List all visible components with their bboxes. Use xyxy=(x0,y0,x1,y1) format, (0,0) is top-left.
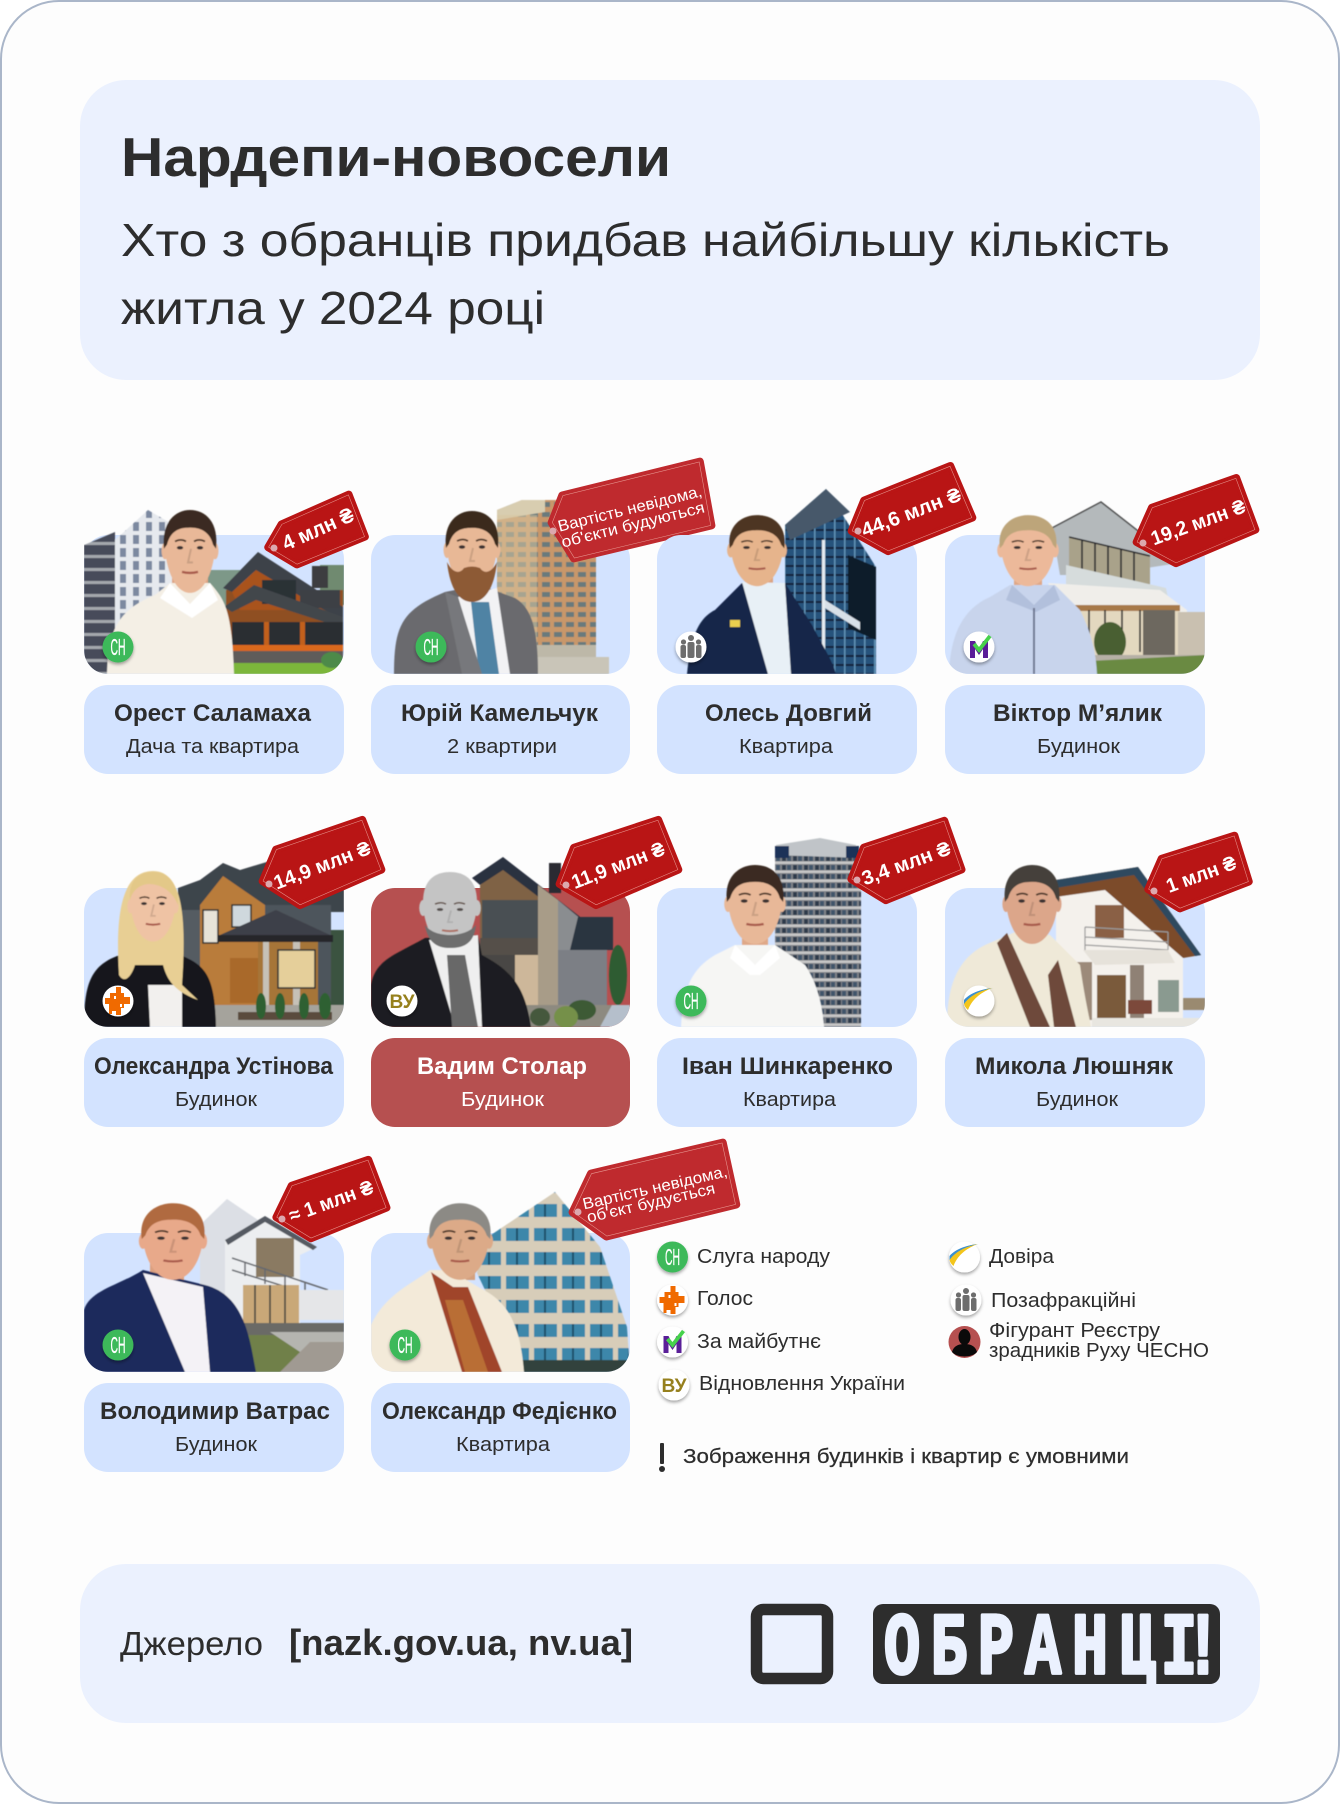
name box: Будинок xyxy=(1036,1089,1118,1111)
name box: Дача та квартира xyxy=(126,736,300,758)
legend item: Голос: Голос xyxy=(697,1288,753,1310)
card: Олександра Устінова xyxy=(84,820,382,1127)
price tag: 14,9 млн ₴ xyxy=(271,837,374,894)
legend item: Довіра xyxy=(949,1242,1055,1272)
name box xyxy=(945,685,1205,774)
badge: Слуга народу: СН xyxy=(110,634,126,660)
legend item: Довіра: Довіра xyxy=(989,1246,1055,1268)
photo panel xyxy=(371,1233,630,1372)
price tag xyxy=(268,494,365,565)
source text: [nazk.gov.ua, nv.ua] xyxy=(289,1622,633,1663)
note: images are conditional xyxy=(659,1443,1129,1472)
name box: Віктор М’ялик xyxy=(993,700,1163,727)
legend item: Слуга народу: Слуга народу xyxy=(697,1246,830,1268)
illustration: tower and portrait xyxy=(394,500,609,674)
card: Юрій Камельчук xyxy=(371,462,712,774)
name box: Володимир Ватрас xyxy=(100,1398,330,1425)
price tag: 1 млн ₴ xyxy=(1163,852,1239,898)
badge: Відновлення України xyxy=(386,986,418,1016)
card: Микола Люшняк xyxy=(945,836,1249,1127)
name box: Квартира xyxy=(456,1434,551,1456)
name box: Олександра Устінова xyxy=(94,1053,334,1080)
legend item: Позафракційні xyxy=(950,1284,1136,1316)
badge: Слуга народу xyxy=(102,1330,134,1360)
price tag: 4 млн ₴ xyxy=(279,503,358,555)
name box xyxy=(945,1038,1205,1127)
price tag: unknown value xyxy=(572,1142,736,1237)
name box xyxy=(371,685,630,774)
badge: Слуга народу: СН xyxy=(424,634,438,660)
price tag: 3,4 млн ₴ xyxy=(859,838,954,890)
price tag xyxy=(276,1160,387,1238)
header panel xyxy=(80,80,1260,380)
name box: Квартира xyxy=(743,1089,837,1111)
legend item: Фігурант Реєстру зрадників xyxy=(948,1320,1209,1362)
legend item: Слуга народу xyxy=(657,1242,830,1272)
card: Олександр Федієнко xyxy=(371,1142,736,1472)
price tag: unknown value: Вартість невідома, xyxy=(556,483,704,536)
card: Вадим Столар (highlighted) xyxy=(371,820,678,1127)
name box: Орест Саламаха xyxy=(114,700,312,727)
price tag xyxy=(851,821,962,900)
illustration: modern house and portrait xyxy=(949,502,1205,674)
badge: Слуга народу xyxy=(676,986,706,1016)
illustration: house and portrait xyxy=(947,865,1205,1027)
legend item: За майбутнє xyxy=(657,1326,821,1358)
price tag: unknown value xyxy=(550,462,712,558)
photo panel xyxy=(84,888,344,1027)
footer panel xyxy=(80,1564,1260,1723)
name box xyxy=(371,1038,630,1127)
illustration: tower and portrait xyxy=(681,838,861,1027)
price tag: 11,9 млн ₴ xyxy=(569,838,668,894)
badge: Слуга народу: СН xyxy=(398,1332,412,1358)
price tag: 19,2 млн ₴ xyxy=(1148,496,1249,550)
badge: Позафракційні xyxy=(676,632,706,662)
logo: wordmark: ОБРАНЦІ! xyxy=(884,1601,1221,1700)
subtitle: житла у 2024 році xyxy=(121,282,545,334)
legend item: Відновлення України: ВУ xyxy=(662,1376,687,1397)
badge: Слуга народу xyxy=(102,632,134,662)
legend: parties xyxy=(657,1242,1209,1400)
legend item: Фігурант Реєстру зрадників: зрадників Руху ЧЕСНО xyxy=(989,1340,1209,1362)
card: Володимир Ватрас xyxy=(84,1160,387,1472)
name box: Юрій Камельчук xyxy=(401,700,599,727)
photo panel xyxy=(657,888,917,1027)
card: Віктор М'ялик xyxy=(945,478,1256,774)
subtitle xyxy=(121,214,1170,334)
name box: Квартира xyxy=(739,736,834,758)
illustration: apartment block and portrait xyxy=(371,1192,630,1372)
legend item: Слуга народу: СН xyxy=(665,1244,680,1270)
photo panel xyxy=(84,535,344,674)
price tag xyxy=(1136,478,1256,563)
name box xyxy=(657,1038,917,1127)
note: images are conditional: Зображення будинків і квартир є умовними xyxy=(683,1446,1129,1468)
legend item: Голос xyxy=(657,1284,753,1316)
name box: Будинок xyxy=(461,1089,544,1111)
legend item: Позафракційні: Позафракційні xyxy=(991,1290,1136,1312)
name box: 2 квартири xyxy=(447,736,557,758)
photo panel xyxy=(657,535,917,674)
name box xyxy=(84,1038,344,1127)
photo panel xyxy=(84,1233,344,1372)
illustration: house and portrait xyxy=(84,1199,344,1372)
source text xyxy=(120,1622,633,1663)
name box xyxy=(84,685,344,774)
badge: Довіра xyxy=(964,986,994,1016)
legend item: За майбутнє: За майбутнє xyxy=(697,1331,821,1353)
name box xyxy=(657,685,917,774)
illustration: house and portrait xyxy=(371,857,630,1028)
badge: Слуга народу: СН xyxy=(110,1332,126,1358)
name box: Олександр Федієнко xyxy=(382,1398,617,1425)
name box: Будинок xyxy=(175,1434,257,1456)
card: Олесь Довгий xyxy=(657,466,972,774)
photo panel xyxy=(945,888,1205,1027)
badge: Слуга народу xyxy=(390,1330,420,1360)
badge: Відновлення України: ВУ xyxy=(390,992,415,1013)
badge: За майбутнє xyxy=(964,632,994,662)
logo: square mark xyxy=(756,1610,828,1678)
title: Нардепи-новосели xyxy=(121,126,671,188)
photo panel xyxy=(371,535,630,674)
price tag: unknown value: об'єкти будуються xyxy=(560,499,706,552)
card: Іван Шинкаренко xyxy=(657,821,962,1127)
photo panel xyxy=(371,888,630,1027)
price tag xyxy=(559,820,678,905)
price tag: ≈ 1 млн ₴ xyxy=(286,1177,376,1227)
name box: Микола Люшняк xyxy=(975,1053,1174,1080)
photo panel xyxy=(945,535,1205,674)
source text: Джерело xyxy=(120,1625,263,1662)
illustration: house and portrait xyxy=(84,510,344,674)
price tag xyxy=(1148,836,1249,909)
price tag: 44,6 млн ₴ xyxy=(858,484,964,542)
price tag xyxy=(262,820,382,905)
name box: Іван Шинкаренко xyxy=(682,1053,893,1080)
subtitle: Хто з обранців придбав найбільшу кількість xyxy=(121,214,1170,266)
price tag xyxy=(852,466,972,551)
legend item: Фігурант Реєстру зрадників: Фігурант Реєстру xyxy=(989,1320,1160,1342)
name box: Вадим Столар xyxy=(417,1053,587,1080)
legend item: Відновлення України xyxy=(658,1370,905,1400)
name box: Олесь Довгий xyxy=(705,700,872,727)
badge: Слуга народу: СН xyxy=(684,988,698,1014)
name box xyxy=(84,1383,344,1472)
name box: Будинок xyxy=(175,1089,257,1111)
card: Орест Саламаха xyxy=(84,494,365,774)
illustration: house and portrait xyxy=(84,855,344,1027)
badge: Голос xyxy=(102,986,134,1016)
illustration: glass tower and portrait xyxy=(687,489,876,674)
icon: exclamation mark xyxy=(659,1443,665,1472)
price tag: unknown value: Вартість невідома, xyxy=(581,1164,729,1213)
badge: Слуга народу xyxy=(416,632,446,662)
name box xyxy=(371,1383,630,1472)
legend item: Відновлення України: Відновлення України xyxy=(699,1373,905,1395)
price tag: unknown value: об'єкт будується xyxy=(585,1180,717,1227)
name box: Будинок xyxy=(1037,736,1120,758)
